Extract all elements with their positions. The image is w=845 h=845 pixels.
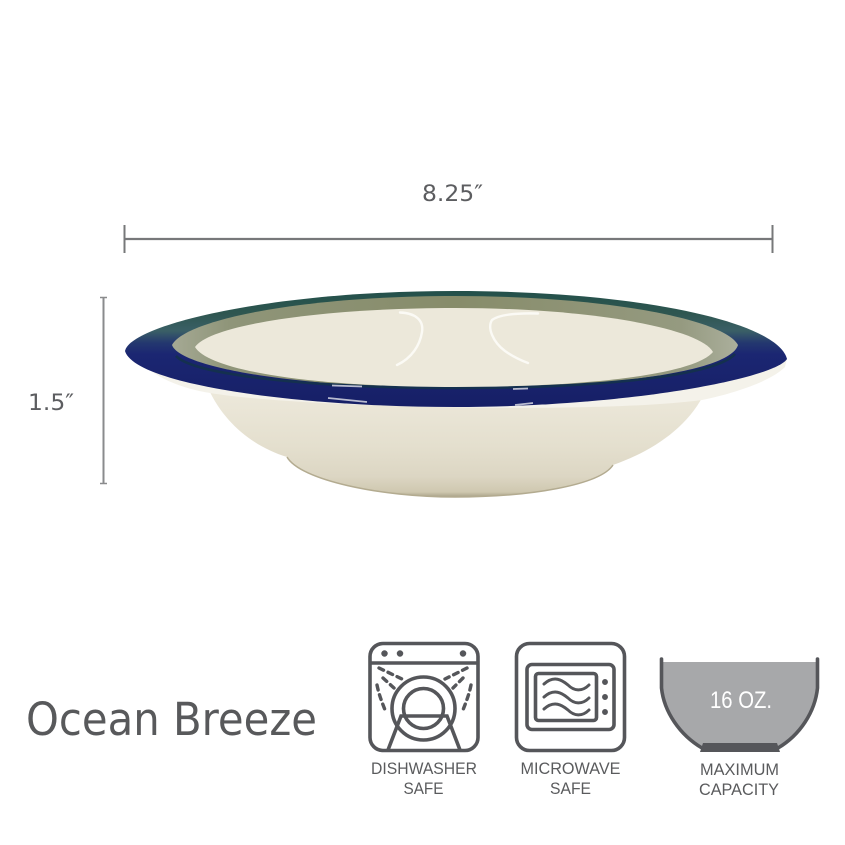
water spray dashes	[377, 668, 471, 710]
product name: Ocean Breeze	[26, 693, 317, 746]
product photo: bowl	[125, 291, 787, 497]
icon: maximum capacity bowl	[661, 659, 818, 752]
cream well	[195, 308, 713, 387]
rim highlights	[328, 386, 533, 405]
capacity value: 16 OZ.	[710, 687, 772, 714]
bowl underside	[208, 388, 703, 497]
glaze highlights	[397, 312, 422, 365]
label: dishwasher safe: DISHWASHER	[371, 759, 477, 778]
label: microwave safe: MICROWAVE	[520, 759, 620, 778]
label: microwave safe: SAFE	[550, 779, 591, 798]
dimension: height 1.5 inches: 1.5″	[28, 391, 74, 416]
dark lip line above blue band	[176, 354, 735, 388]
icon: microwave safe	[516, 644, 624, 750]
outer rim silhouette	[125, 291, 787, 407]
microwave waves	[544, 679, 589, 715]
flange underside	[150, 358, 787, 408]
label: maximum capacity: CAPACITY	[699, 780, 779, 799]
label: dishwasher safe: SAFE	[404, 779, 444, 798]
icon: dishwasher safe	[370, 644, 478, 750]
olive glaze band	[172, 296, 738, 388]
foot ring shading	[287, 457, 613, 497]
dimension: width 8.25 inches: 8.25″	[422, 182, 483, 207]
label: maximum capacity: MAXIMUM	[700, 760, 779, 779]
